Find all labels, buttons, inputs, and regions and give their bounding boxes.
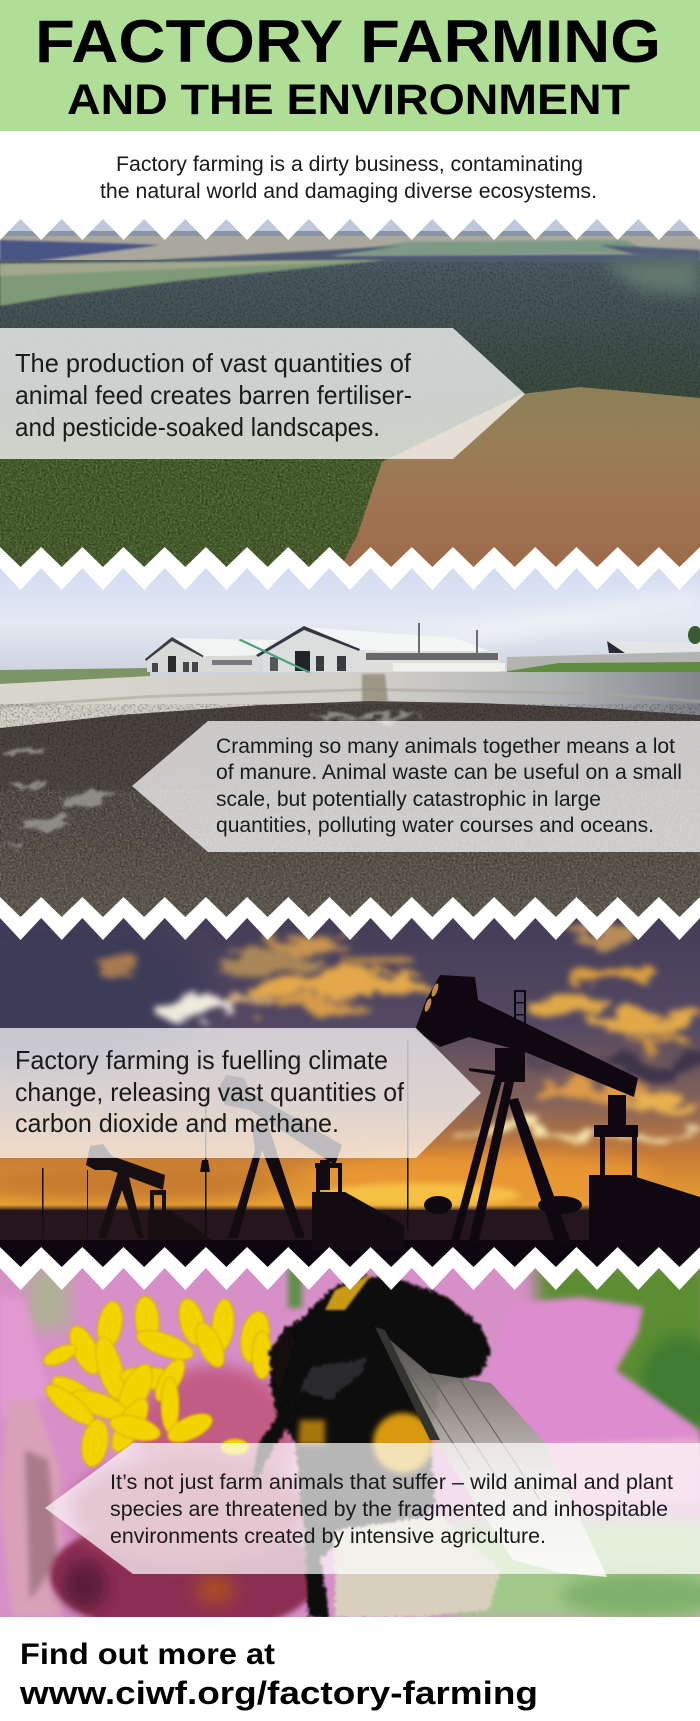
photo: manure lagoon and farm buildings (0, 567, 700, 918)
callout: wildlife (45, 1443, 700, 1574)
callout: animal feed (0, 328, 525, 459)
icon: middle pumpjack silhouette (200, 1075, 404, 1250)
callout: climate change: carbon dioxide and methane. (15, 1108, 339, 1138)
bee body (250, 1274, 607, 1617)
flower centre (50, 1365, 320, 1635)
callout: climate change: change, releasing vast quantities of (15, 1077, 405, 1107)
callout: climate change (0, 1028, 481, 1158)
callout: animal feed: and pesticide-soaked landscapes. (15, 412, 380, 442)
yellow stamens (40, 1295, 273, 1469)
callout: wildlife: environments created by intensive agriculture. (110, 1525, 546, 1548)
photo: deforested farmland aerial view (0, 219, 700, 568)
callout: climate change: Factory farming is fuelling climate (15, 1045, 388, 1075)
zigzag divider: between panels two and three (0, 897, 700, 940)
pink petals (0, 1295, 700, 1617)
icon: small pumpjack silhouette (42, 1144, 212, 1240)
horizon glow (0, 1153, 660, 1207)
callout: wildlife: It’s not just farm animals that suffer – wild animal and plant (110, 1471, 673, 1494)
callout: wildlife: species are threatened by the fragmented and inhospitable (110, 1498, 668, 1521)
zigzag edge: top of first photo (0, 210, 700, 240)
callout: manure: quantities, polluting water courses and oceans. (216, 814, 654, 837)
clouds (96, 926, 700, 1139)
panel: manure lagoon (0, 567, 700, 918)
panel: wildlife and biodiversity (0, 1262, 700, 1635)
callout: manure: Cramming so many animals together means a lot (216, 735, 675, 758)
icon: left barn (145, 637, 277, 672)
background foliage (28, 1262, 700, 1620)
footer: call to action (19, 1638, 538, 1711)
header: title banner (0, 0, 700, 131)
intro text (100, 153, 597, 203)
callout: animal feed: The production of vast quantities of (15, 348, 412, 378)
icon: right barn (238, 623, 505, 673)
photo: bumblebee on a pink flower (0, 1262, 700, 1635)
footer: call to action: Find out more at (20, 1638, 275, 1671)
photo: oil pumpjacks at sunset (0, 910, 700, 1268)
footer: call to action: www.ciwf.org/factory-farming (19, 1675, 538, 1711)
callout: manure: of manure. Animal waste can be useful on a small (216, 761, 682, 784)
panel: animal feed landscapes (0, 219, 700, 568)
callout: manure (132, 721, 700, 852)
callout: animal feed: animal feed creates barren fertiliser- (15, 380, 412, 410)
title: line two: AND THE ENVIRONMENT (67, 76, 630, 124)
icon: large pumpjack silhouette (407, 975, 700, 1268)
zigzag divider: between panels one and two (0, 547, 700, 590)
zigzag divider: between panels three and four (0, 1247, 700, 1290)
panel: climate change (0, 910, 700, 1268)
title: line one: FACTORY FARMING (35, 8, 661, 75)
callout: manure: scale, but potentially catastrophic in large (216, 788, 601, 811)
intro text: the natural world and damaging diverse ecosystems. (100, 180, 597, 203)
intro text: Factory farming is a dirty business, contaminating (116, 153, 583, 176)
dusk shadow (0, 928, 212, 1065)
